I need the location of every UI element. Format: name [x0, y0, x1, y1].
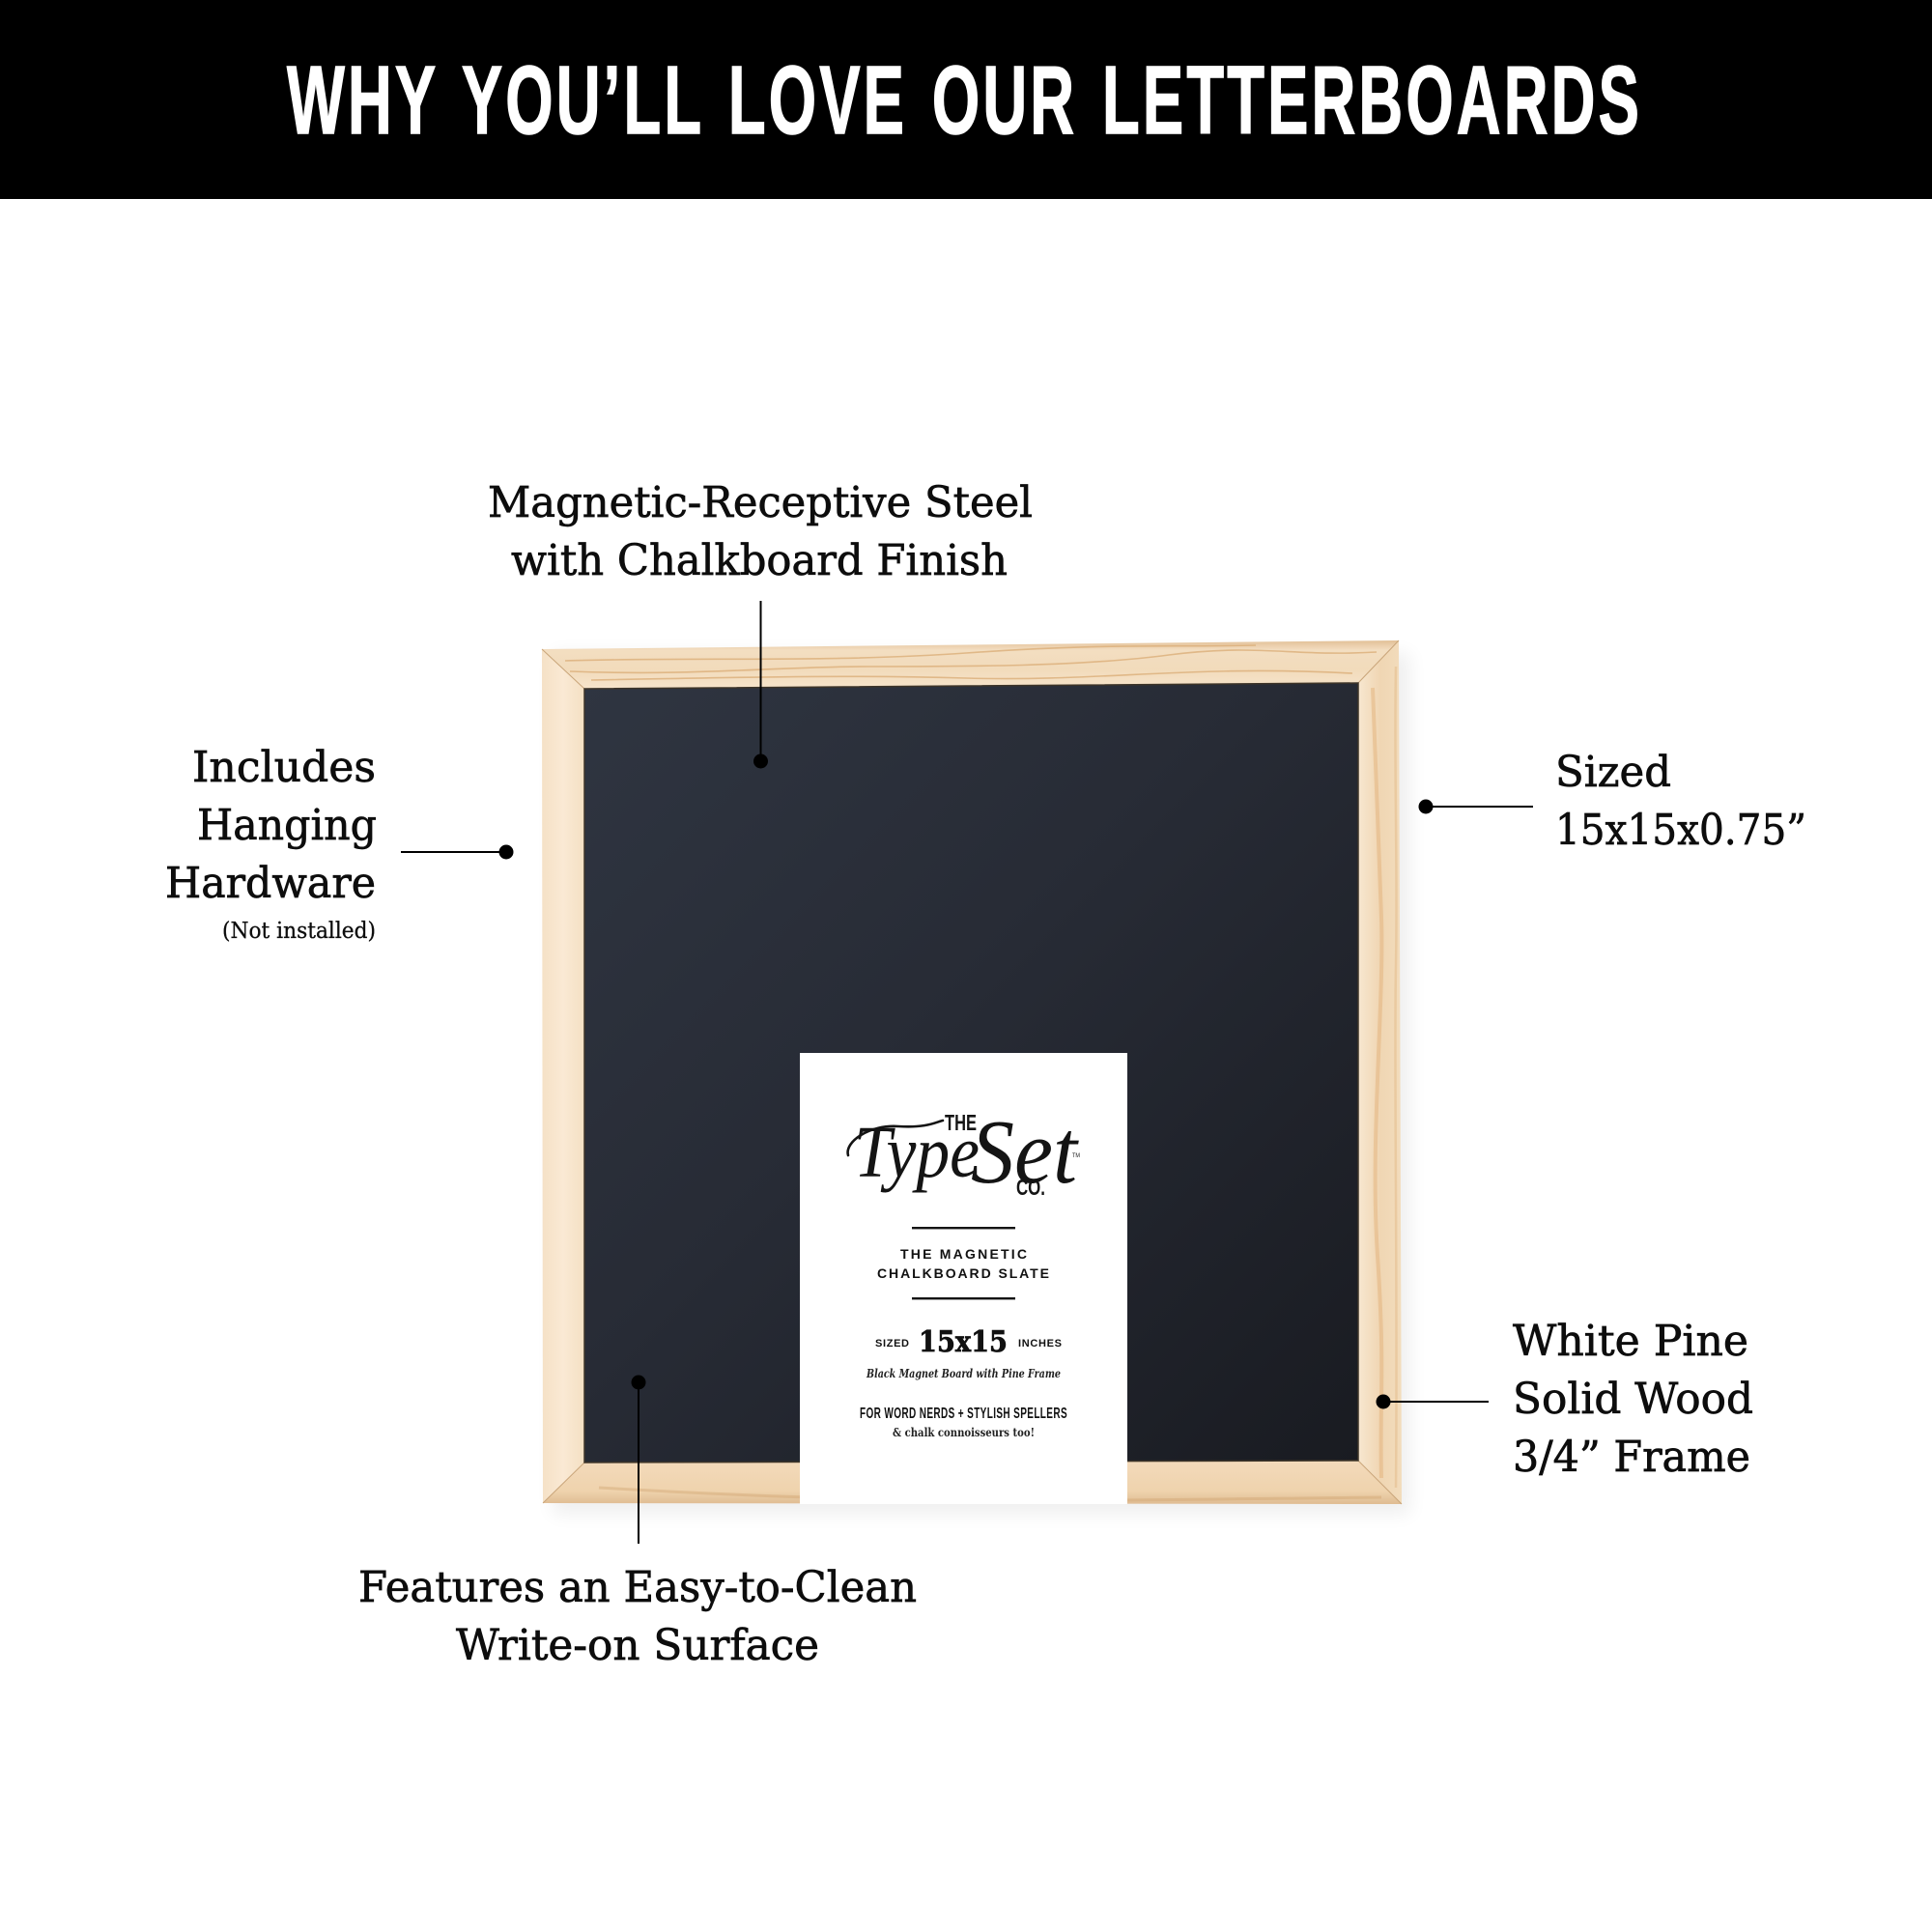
callout: hanging hardware: Includes	[192, 743, 376, 792]
callout: white pine frame: 3/4” Frame	[1513, 1433, 1750, 1482]
callout: steel surface	[488, 478, 1033, 769]
callout: write-on surface: Features an Easy-to-Clean	[358, 1563, 917, 1612]
callout: white pine frame	[1376, 1317, 1753, 1482]
card heading	[877, 1246, 1049, 1281]
callout: size: Sized	[1555, 748, 1671, 797]
callout: hanging hardware	[165, 743, 514, 944]
callout: steel surface: with Chalkboard Finish	[511, 536, 1008, 585]
callout: write-on surface: Write-on Surface	[456, 1621, 819, 1670]
callout: hanging hardware: Hanging	[197, 801, 377, 850]
card size: SIZED	[875, 1338, 909, 1350]
card description: Black Magnet Board with Pine Frame	[866, 1367, 1061, 1380]
header banner	[0, 0, 1932, 199]
logo: CO.	[1016, 1175, 1045, 1200]
callout: hanging hardware: Hardware	[165, 859, 376, 908]
card heading: THE MAGNETIC	[900, 1246, 1027, 1262]
product: letterboard	[542, 640, 1410, 1515]
logo	[848, 1102, 1080, 1203]
wood frame	[542, 640, 1402, 1504]
callout: size	[1418, 748, 1806, 855]
card size	[875, 1325, 1062, 1359]
callout: size: 15x15x0.75”	[1555, 806, 1806, 855]
logo: TM	[1072, 1153, 1080, 1159]
logo: Set	[971, 1102, 1079, 1203]
callout: white pine frame: White Pine	[1513, 1317, 1748, 1366]
callout: steel surface: Magnetic-Receptive Steel	[488, 478, 1033, 527]
logo: THE	[945, 1110, 977, 1135]
chalkboard surface	[584, 683, 1358, 1463]
callout: white pine frame: Solid Wood	[1513, 1375, 1753, 1424]
callout: write-on surface	[358, 1376, 917, 1670]
logo: Type	[854, 1112, 980, 1193]
product card	[800, 1053, 1127, 1504]
card size: INCHES	[1018, 1338, 1062, 1350]
callout: hanging hardware: (Not installed)	[222, 919, 376, 944]
card tagline	[860, 1406, 1067, 1439]
card tagline: FOR WORD NERDS + STYLISH SPELLERS	[860, 1406, 1067, 1422]
card size: 15x15	[919, 1325, 1008, 1359]
card tagline: & chalk connoisseurs too!	[893, 1426, 1035, 1439]
card heading: CHALKBOARD SLATE	[877, 1265, 1049, 1281]
